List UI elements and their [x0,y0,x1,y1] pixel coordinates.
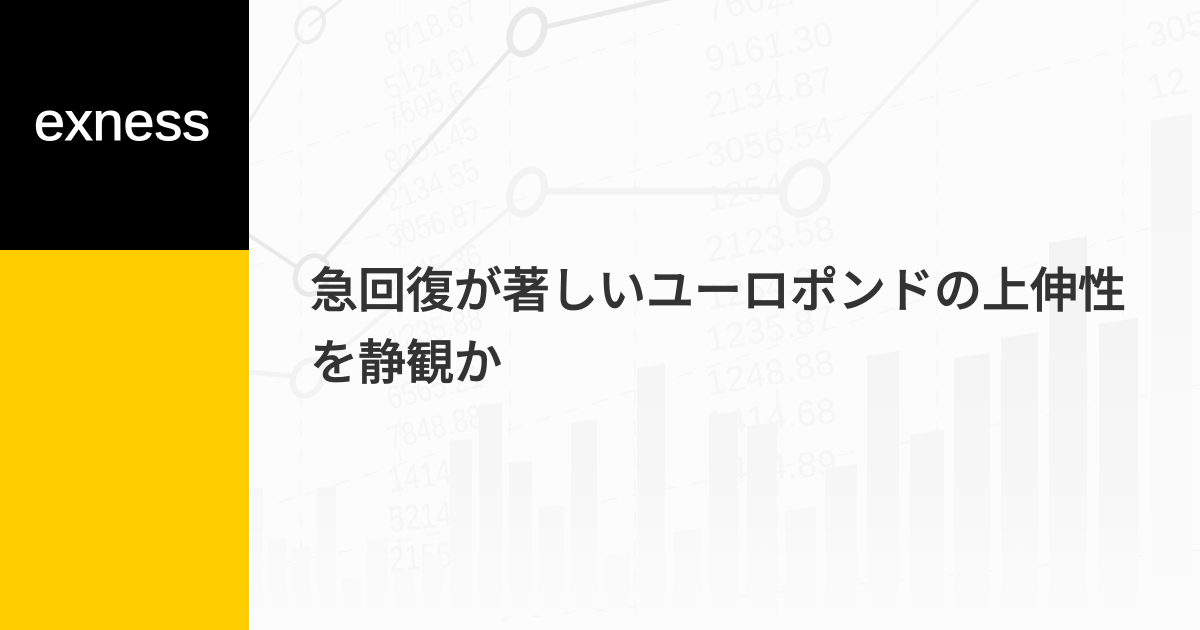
background chart illustration: 1254.92 [702,255,838,318]
bar chart [249,113,1192,630]
background chart illustration: 1414.68 [705,390,838,444]
background chart illustration: 2134.87 [701,59,837,126]
grid lines [249,0,1200,630]
background chart illustration: 1248.88 [702,341,838,404]
yellow panel [0,250,249,630]
background chart illustration: 12 [1143,59,1191,108]
background number columns: 7848.88 [383,399,486,457]
background chart illustration: 1254 [701,163,788,220]
background chart illustration: 3056.54 [701,109,837,176]
background chart illustration: 9161.30 [701,13,837,80]
background number columns: 5124.61 [379,37,483,107]
background number columns: 2545.36 [382,238,486,299]
background number columns: 8251.45 [379,111,483,181]
line chart [249,0,980,401]
background number columns: 5214. [387,493,462,540]
title [310,265,1126,390]
title: を静観か [310,337,502,390]
background chart illustration: 1235.87 [702,297,838,360]
background number columns: 7605.6 [380,75,470,137]
background chart illustration: 2123.58 [702,207,838,270]
background number columns: 3056.87 [382,194,486,255]
background chart illustration: 1414.89 [706,442,838,492]
background number columns: 2155 [387,534,454,580]
background chart illustration [249,0,1200,580]
background number columns: 1235.88 [383,301,486,359]
background number columns: 6565.21 [383,359,486,417]
black logo panel [0,0,249,250]
title: 急回復が著しいユーロポンドの上伸性 [310,265,1126,318]
background number columns: 2134.55 [380,152,484,219]
background number columns [379,0,486,580]
background number columns: 1414. [386,450,462,500]
